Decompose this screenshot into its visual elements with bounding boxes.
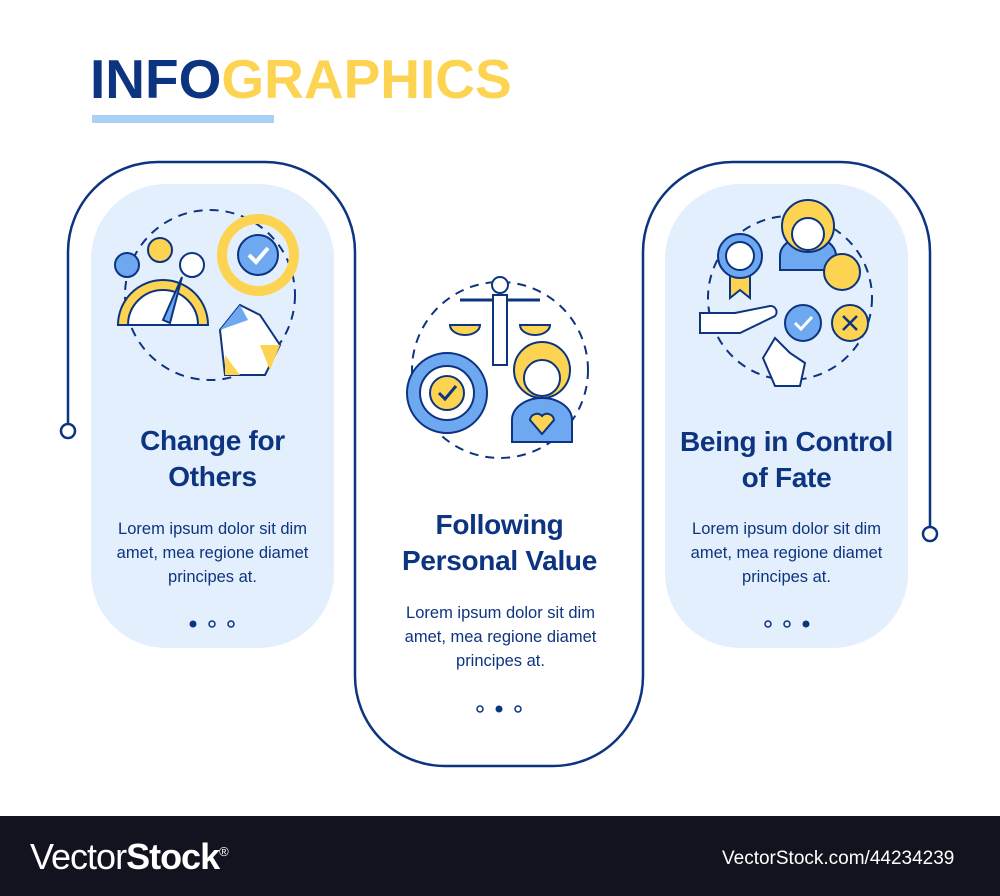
text: middle body	[405, 604, 596, 670]
dots left	[190, 620, 235, 628]
footer bar	[0, 816, 1000, 896]
text: left body: amet, mea regione diamet	[117, 544, 308, 562]
heading: Following Personal Value: Following	[436, 509, 563, 540]
text: right body: principes at.	[742, 568, 831, 586]
text: middle body: amet, mea regione diamet	[405, 628, 596, 646]
icon: change for others	[114, 209, 299, 381]
text: middle body: principes at.	[456, 652, 545, 670]
heading: Following Personal Value	[402, 509, 597, 576]
text: right body: Lorem ipsum dolor sit dim	[692, 520, 881, 538]
footer logo: VectorStock®	[30, 836, 228, 877]
text: left body: Lorem ipsum dolor sit dim	[118, 520, 307, 538]
heading: Change for Others: Change for	[140, 425, 285, 456]
dots middle	[476, 705, 522, 713]
heading: Following Personal Value: Personal Value	[402, 545, 597, 576]
text: left body	[117, 520, 308, 586]
heading: Change for Others: Others	[168, 461, 257, 492]
footer url: VectorStock.com/44234239	[722, 848, 954, 869]
panel: right background	[665, 184, 908, 648]
heading: Being in Control of Fate: Being in Control	[680, 426, 893, 457]
text: right body: amet, mea regione diamet	[691, 544, 882, 562]
icon: following personal value	[406, 276, 589, 459]
text: right body	[691, 520, 882, 586]
title underline	[92, 115, 274, 123]
heading: Change for Others	[140, 425, 285, 492]
text: left body: principes at.	[168, 568, 257, 586]
title: INFOGRAPHICS	[90, 48, 512, 110]
heading: Being in Control of Fate	[680, 426, 893, 493]
icon: being in control of fate	[699, 199, 873, 387]
dots right	[764, 620, 810, 628]
text: middle body: Lorem ipsum dolor sit dim	[406, 604, 595, 622]
panel: left background	[91, 184, 334, 648]
heading: Being in Control of Fate: of Fate	[742, 462, 831, 493]
